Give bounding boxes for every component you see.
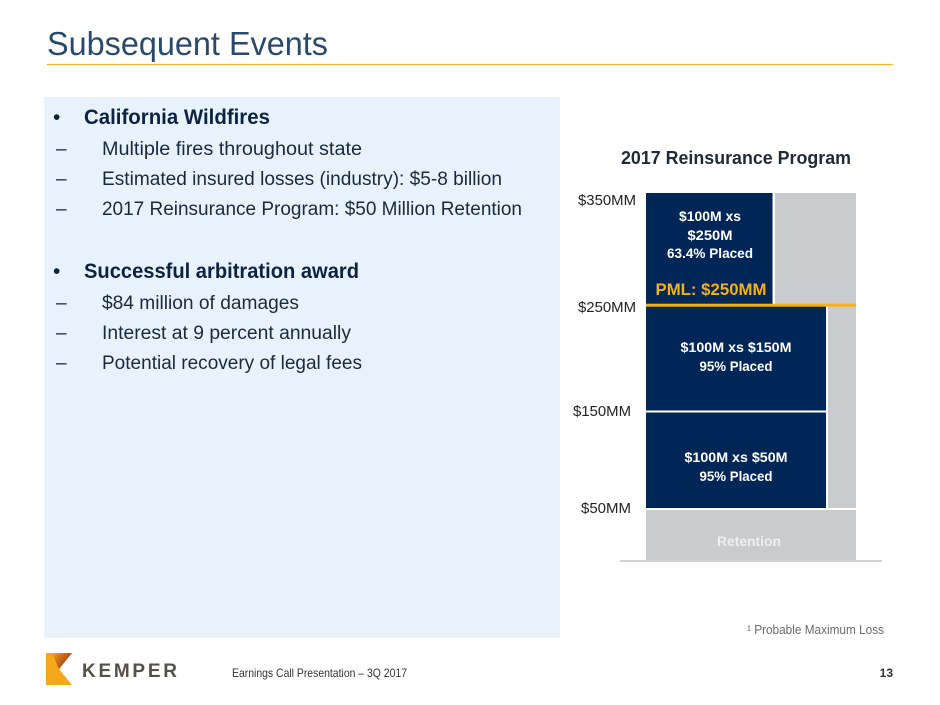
heading: California Wildfires: • [53,106,60,129]
unplaced: top layer [775,193,856,304]
text block: arbitration details: Potential recovery of legal fees [102,353,362,374]
layer: $100M xs $150M: 95% Placed [700,358,772,374]
text block: wildfire details: Multiple fires throughout state [102,139,362,160]
layer: $100M xs $50M [646,412,826,508]
logo: Kemper: KEMPER [82,661,177,682]
text block: wildfire details: – [56,199,67,220]
text block: arbitration details: $84 million of damages [102,293,299,314]
layer: $100M xs $50M: 95% Placed [700,468,772,484]
text block: wildfire details: 2017 Reinsurance Program: $50 Million Retention [102,199,522,220]
retention: Retention [717,533,781,549]
axis labels: $150MM [573,404,631,420]
page number: 13 [880,666,893,680]
logo: Kemper [46,653,177,685]
text block: arbitration details: – [56,293,67,314]
layer: $100M xs $50M: $100M xs $50M [684,449,788,465]
heading: Successful arbitration award: • [53,260,60,283]
heading: Successful arbitration award: Successful arbitration award [84,260,359,283]
axis labels: $50MM [581,501,631,517]
text block: wildfire details: Estimated insured losses (industry): $5-8 billion [102,169,502,190]
panel: bullet list [44,97,560,638]
text block: wildfire details: – [56,139,67,160]
axis labels: $250MM [578,300,636,316]
layer: $100M xs $250M: $250M [688,227,732,243]
layer: $100M xs $250M: $100M xs [679,208,741,224]
chart title: 2017 Reinsurance Program [621,147,851,168]
PML line [646,304,856,307]
PML label: PML: $250MM [656,280,766,299]
axis labels [573,193,636,517]
footnote: ¹ Probable Maximum Loss [747,623,884,637]
axis labels: $350MM [578,193,636,209]
text block: arbitration details: – [56,323,67,344]
text block: arbitration details: Interest at 9 percent annually [102,323,352,344]
heading: California Wildfires: California Wildfires [84,106,270,129]
layer: $100M xs $250M: 63.4% Placed [667,245,753,261]
layer: $100M xs $150M: $100M xs $150M [680,339,792,355]
layer: $100M xs $150M [646,306,826,410]
retention [646,510,856,560]
text block: wildfire details [56,139,522,220]
chart: reinsurance tower [573,193,882,561]
title: Subsequent Events [47,25,328,62]
footer text: Earnings Call Presentation – 3Q 2017 [232,666,407,680]
text block: arbitration details: – [56,353,67,374]
text block: wildfire details: – [56,169,67,190]
text block: arbitration details [56,293,362,374]
unplaced: lower layers [828,306,856,508]
layer: $100M xs $250M [646,193,772,304]
